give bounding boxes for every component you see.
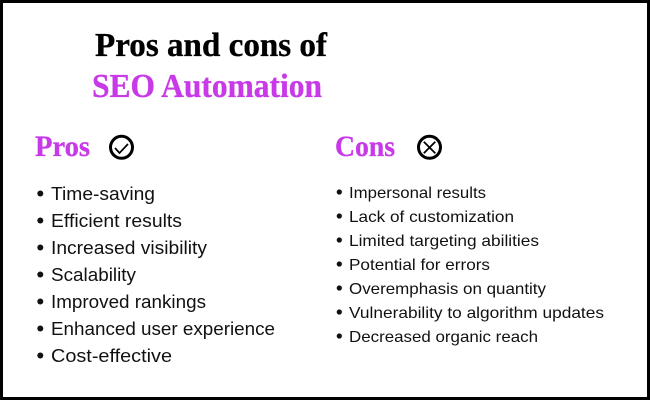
list: pros: Improved rankings [51, 292, 206, 312]
list: cons: Overemphasis on quantity [349, 281, 546, 298]
title: SEO Automation [92, 68, 322, 105]
title [92, 27, 328, 105]
list: pros: Time-saving [51, 184, 155, 204]
list: cons: Lack of customization [349, 209, 514, 226]
list: pros: Enhanced user experience [51, 319, 275, 339]
icon: cross in circle [418, 136, 440, 158]
list: pros: Scalability [51, 265, 136, 285]
list: cons: Impersonal results [349, 185, 486, 202]
list: cons: Potential for errors [349, 257, 490, 274]
icon: check in circle [110, 136, 132, 158]
list: pros: Increased visibility [51, 238, 207, 258]
list: cons: Limited targeting abilities [349, 233, 539, 250]
title: Pros and cons of [95, 27, 328, 64]
list: pros [37, 184, 275, 366]
list: cons: Decreased organic reach [349, 329, 538, 346]
list: cons [337, 185, 604, 346]
list: pros: Cost-effective [51, 346, 172, 366]
list: pros: Efficient results [51, 211, 182, 231]
panel: cons [335, 130, 604, 346]
heading: pros: Pros [35, 130, 90, 163]
list: cons: Vulnerability to algorithm updates [349, 305, 604, 322]
heading: cons: Cons [335, 130, 395, 163]
panel: pros [35, 130, 275, 366]
